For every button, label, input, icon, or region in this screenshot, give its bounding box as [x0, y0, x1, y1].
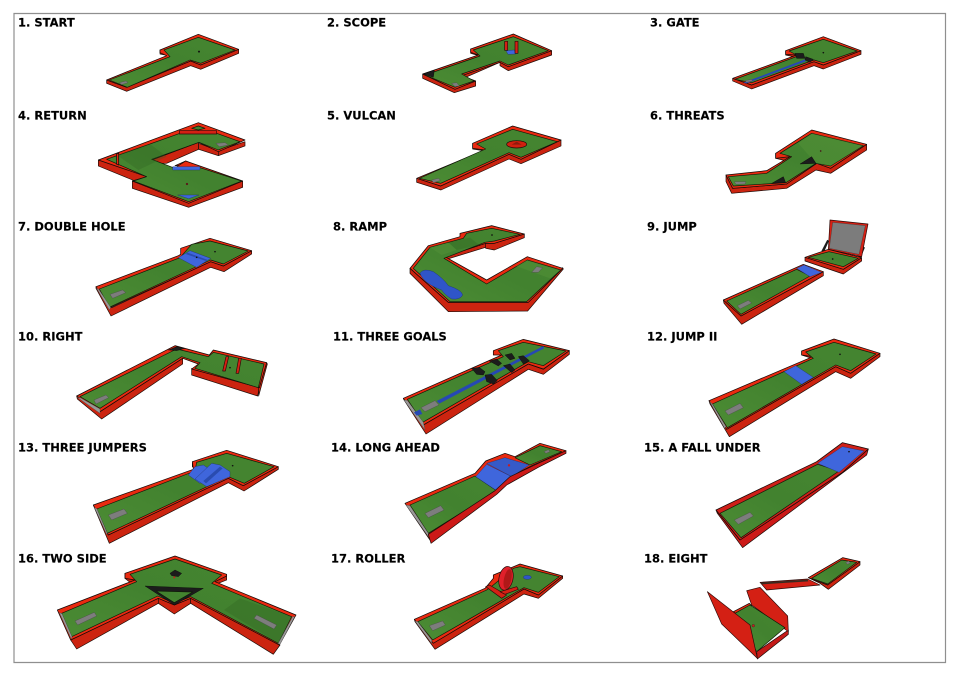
course 4: return: [98, 123, 245, 207]
tee mat: [745, 79, 752, 82]
blue channel: [414, 346, 544, 416]
heading: 14. LONG AHEAD: 14. LONG AHEAD: [331, 440, 440, 454]
tee mat: [452, 83, 459, 87]
small tee mat: [544, 450, 550, 453]
heading: 13. THREE JUMPERS: 13. THREE JUMPERS: [18, 440, 147, 454]
heading: 2. SCOPE: 2. SCOPE: [327, 16, 386, 30]
cup: [822, 52, 824, 53]
course 3: gate: [733, 37, 861, 89]
cup: [229, 367, 231, 368]
heading: 15. A FALL UNDER: 15. A FALL UNDER: [644, 440, 761, 454]
cup: [820, 150, 821, 152]
blue landing: [818, 447, 864, 472]
course 11: three goals: [403, 339, 569, 434]
heading: 12. JUMP II: 12. JUMP II: [647, 330, 717, 344]
tee mat: [734, 182, 746, 184]
tee mat: [532, 267, 543, 272]
tee mat: [421, 401, 439, 412]
blue ramp: [476, 458, 529, 491]
three pairs of goal blocks: [472, 353, 529, 384]
cup: [198, 51, 200, 53]
heading: 17. ROLLER: 17. ROLLER: [331, 552, 406, 566]
heading: 10. RIGHT: 10. RIGHT: [18, 330, 83, 344]
heading: 16. TWO SIDE: 16. TWO SIDE: [18, 552, 107, 566]
course 10: right: [77, 346, 267, 419]
blue double hole: [178, 251, 211, 267]
lower section with tall walls: [707, 587, 788, 659]
tee mat: [110, 290, 126, 298]
tee mat: [734, 512, 753, 524]
heading: 7. DOUBLE HOLE: 7. DOUBLE HOLE: [18, 220, 126, 234]
blue jump strip: [784, 366, 813, 384]
course 18: eight: [707, 558, 860, 659]
black mound and cup: [170, 570, 182, 578]
upper green section: [808, 558, 860, 589]
left tee mat: [75, 612, 97, 625]
course 6: threats: [726, 130, 867, 193]
course 2: scope: [423, 34, 552, 93]
tee mat: [725, 403, 743, 415]
heading: 6. THREATS: 6. THREATS: [650, 108, 725, 122]
heading: 3. GATE: 3. GATE: [650, 16, 700, 30]
tee mat: [432, 178, 441, 183]
cup: [848, 451, 850, 452]
tee mat: [216, 143, 228, 147]
tee mat: [94, 395, 109, 404]
cup: [839, 353, 841, 355]
cup: [508, 464, 510, 466]
lane: [723, 264, 823, 324]
blue bar: [173, 167, 200, 170]
blue channel: [743, 59, 806, 83]
blue cup: [523, 575, 531, 579]
cup: [232, 465, 233, 466]
course 5: vulcan: [417, 126, 561, 190]
corner wedge: [168, 347, 185, 351]
heading: 1. START: 1. START: [18, 16, 75, 30]
right tee mat: [254, 615, 277, 629]
course 12: jump II: [709, 339, 880, 437]
red roller loop: [486, 565, 518, 598]
middle ramp: [760, 579, 820, 590]
left gutter: [96, 288, 111, 310]
course 16: two side: [57, 556, 296, 654]
course 1: start: [107, 34, 239, 91]
black triangle bumper: [145, 586, 203, 605]
course 14: long ahead: [405, 443, 566, 543]
course 9: jump: [723, 220, 868, 324]
tee mat: [429, 621, 445, 631]
heading: 8. RAMP: 8. RAMP: [333, 220, 387, 234]
red posts: [223, 357, 241, 373]
gate blocks: [795, 53, 813, 62]
cup: [214, 251, 216, 252]
water pond: [420, 270, 463, 299]
front wall: [428, 451, 566, 543]
heading: 9. JUMP: 9. JUMP: [647, 220, 697, 234]
landing platform with net: [805, 220, 868, 274]
tee mat: [119, 81, 128, 85]
tee mat: [425, 506, 444, 518]
gate posts with blue cup: [505, 41, 518, 54]
corner wedge: [423, 70, 434, 77]
course 7: double hole: [96, 238, 252, 316]
course 17: roller: [414, 564, 563, 649]
three blue jumpers: [188, 463, 230, 487]
course 8: ramp: [410, 226, 563, 312]
course 13: three jumpers: [93, 450, 278, 543]
volcano crater: [507, 141, 527, 148]
top bumper: [179, 126, 217, 134]
black wedges: [772, 157, 816, 183]
course 15: a fall under: [716, 443, 868, 548]
cup: [186, 183, 188, 185]
heading: 18. EIGHT: 18. EIGHT: [644, 552, 708, 566]
heading: 5. VULCAN: 5. VULCAN: [327, 108, 396, 122]
heading: 4. RETURN: 4. RETURN: [18, 108, 87, 122]
cup: [491, 234, 493, 236]
tee mat: [108, 509, 127, 520]
blue corner: [178, 195, 199, 199]
left divider: [117, 153, 119, 165]
heading: 11. THREE GOALS: 11. THREE GOALS: [333, 330, 447, 344]
